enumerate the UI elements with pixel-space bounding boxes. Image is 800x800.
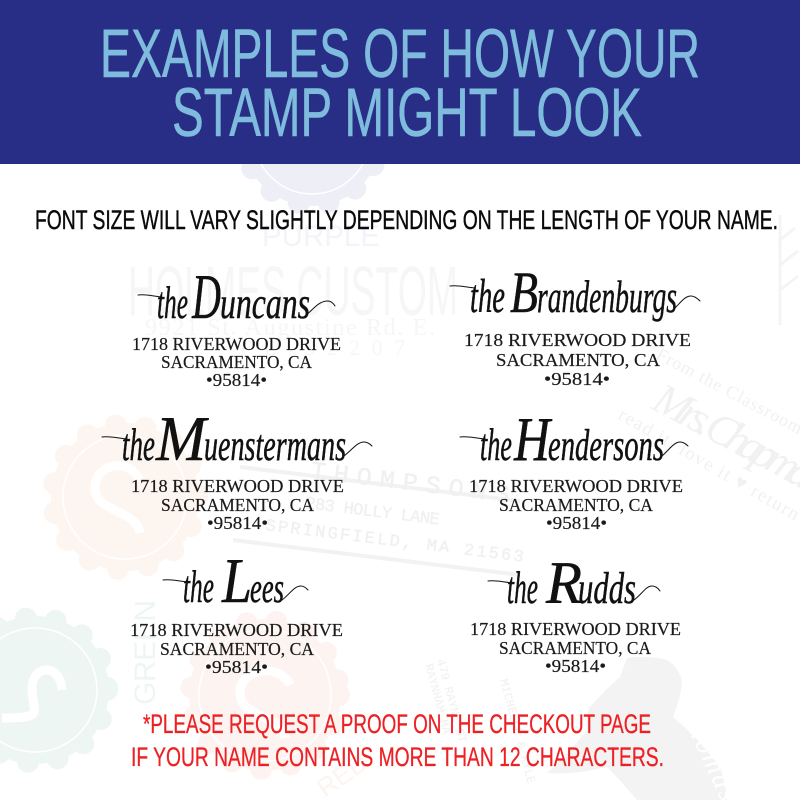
example: the Rudds: the bbox=[507, 562, 538, 613]
example: the Brandenburgs: 1718 RIVERWOOD DRIVE bbox=[464, 330, 691, 350]
example: the Duncans: •95814• bbox=[206, 370, 267, 390]
example: the Lees: L bbox=[221, 545, 252, 616]
example: the Hendersons bbox=[460, 406, 688, 533]
example: the Muenstermans bbox=[102, 403, 372, 533]
example: the Duncans: 1718 RIVERWOOD DRIVE bbox=[132, 334, 341, 354]
example: the Hendersons: 1718 RIVERWOOD DRIVE bbox=[469, 476, 683, 496]
example: the Brandenburgs: •95814• bbox=[544, 369, 610, 389]
example: the Rudds: 1718 RIVERWOOD DRIVE bbox=[470, 619, 681, 639]
background watermark stamps: 283 HOLLY LANE bbox=[304, 495, 441, 530]
example: the Lees: ees bbox=[250, 566, 284, 612]
example: the Rudds: R bbox=[545, 550, 582, 616]
background watermark stamps: THOMPSONS bbox=[309, 457, 511, 510]
red proof notice bbox=[131, 709, 664, 772]
example: the Brandenburgs bbox=[450, 260, 700, 389]
title bbox=[100, 15, 700, 151]
background watermark stamps: RAYNHAM MA bbox=[421, 662, 454, 736]
example: the Brandenburgs: the bbox=[470, 270, 505, 323]
background watermark stamps: GREEN bbox=[129, 600, 162, 705]
example: the Muenstermans: the bbox=[122, 419, 155, 470]
example: the Hendersons: the bbox=[480, 419, 512, 470]
background watermark stamps: PURPLE bbox=[262, 220, 380, 253]
example: the Duncans: SACRAMENTO, CA bbox=[161, 352, 312, 372]
example: the Lees bbox=[130, 545, 343, 677]
example: the Duncans: uncans bbox=[220, 279, 310, 328]
example: the Muenstermans: 1718 RIVERWOOD DRIVE bbox=[131, 476, 344, 496]
example: the Rudds: SACRAMENTO, CA bbox=[499, 638, 651, 658]
background watermark stamps: 9921 St. Augustine Rd. E. bbox=[145, 315, 435, 341]
example: the Lees: SACRAMENTO, CA bbox=[160, 639, 314, 659]
example: the Lees: the bbox=[183, 561, 214, 612]
background watermark stamps: 479 RAYNE ST bbox=[433, 657, 469, 745]
example: the Lees: 1718 RIVERWOOD DRIVE bbox=[130, 620, 343, 640]
example: the Lees: •95814• bbox=[205, 657, 268, 677]
example: the Muenstermans: SACRAMENTO, CA bbox=[161, 495, 314, 515]
example: the Hendersons: SACRAMENTO, CA bbox=[499, 495, 653, 515]
example: the Hendersons: endersons bbox=[548, 421, 664, 470]
example: the Duncans: D bbox=[191, 261, 221, 332]
example: the Brandenburgs: B bbox=[510, 260, 538, 325]
example: the Rudds bbox=[470, 550, 681, 676]
example: the Hendersons: H bbox=[513, 406, 553, 474]
example: the Brandenburgs: SACRAMENTO, CA bbox=[496, 350, 660, 370]
example: the Muenstermans: uenstermans bbox=[204, 421, 346, 470]
background watermark stamps: MICHELLE & KYLE bbox=[496, 677, 538, 785]
example: the Rudds: •95814• bbox=[545, 656, 606, 676]
example: the Brandenburgs: randenburgs bbox=[537, 271, 677, 322]
example: the Duncans: the bbox=[157, 277, 188, 328]
example: the Hendersons: •95814• bbox=[546, 513, 607, 533]
background watermark stamps: FL 32207 bbox=[240, 335, 405, 360]
background watermark stamps: HOLMES CUSTOM bbox=[128, 252, 458, 330]
example: the Rudds: udds bbox=[578, 564, 636, 613]
example: the Muenstermans: M bbox=[155, 403, 209, 474]
header band bbox=[0, 0, 800, 164]
example: the Duncans bbox=[132, 261, 341, 390]
background watermark stamps: SPRINGFIELD, MA 21563 bbox=[264, 517, 525, 568]
example: the Muenstermans: •95814• bbox=[207, 513, 268, 533]
